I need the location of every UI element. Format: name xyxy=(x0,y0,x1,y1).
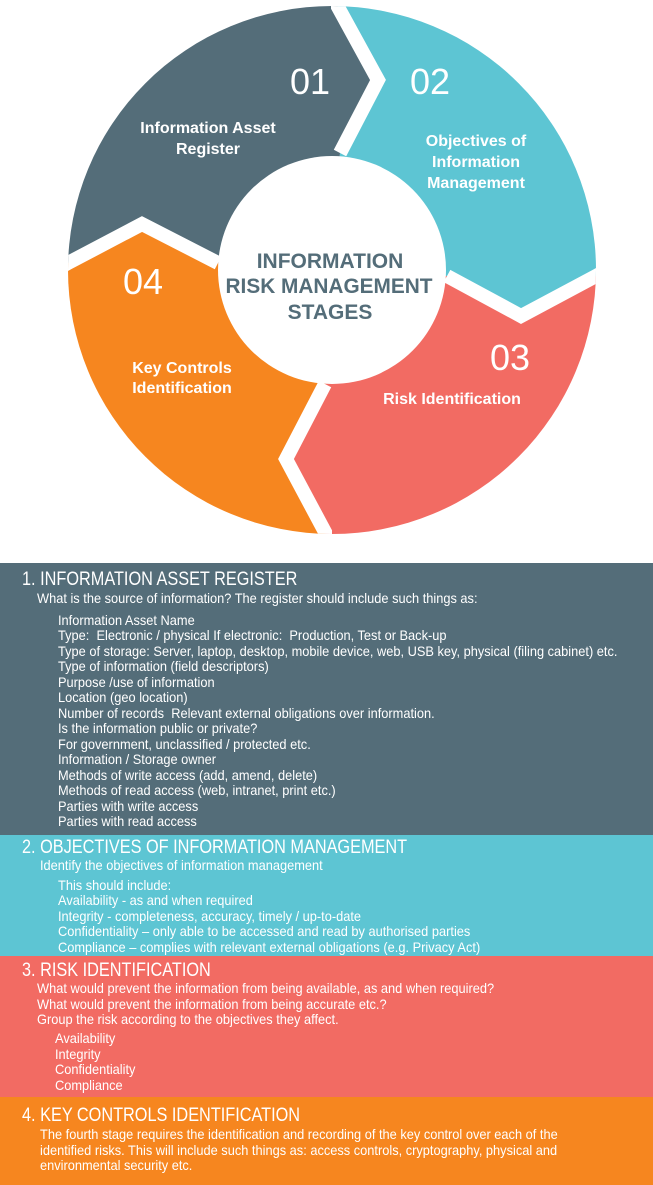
panel: risk identification: Availability xyxy=(55,1030,115,1046)
segment labels: Key Controls xyxy=(132,360,232,377)
panel: objectives: Compliance – complies with relevant external obligations (e.g. Privacy Act) xyxy=(58,939,480,955)
center title: INFORMATION xyxy=(257,250,403,273)
panel: information asset register: Type of information (field descriptors) xyxy=(58,658,269,674)
panel: information asset register: Is the information public or private? xyxy=(58,720,257,736)
panel: risk identification xyxy=(0,956,653,1097)
panel: information asset register: Information Asset Name xyxy=(58,612,195,628)
panel: key controls: environmental security etc. xyxy=(40,1157,192,1173)
panel: risk identification: Group the risk according to the objectives they affect. xyxy=(37,1011,339,1027)
segment labels: Objectives of xyxy=(426,133,527,150)
panel: information asset register: Purpose /use of information xyxy=(58,674,215,690)
segment labels: Risk Identification xyxy=(383,391,521,408)
segment 3 red xyxy=(294,276,596,534)
numbers: 01 xyxy=(290,61,330,102)
panel: information asset register: Type of storage: Server, laptop, desktop, mobile device, web, USB key, physical (filing cabinet) etc. xyxy=(58,643,617,659)
center title: STAGES xyxy=(288,301,372,324)
panel: information asset register: Number of records Relevant external obligations over information. xyxy=(58,705,435,721)
heading 3: 3. RISK IDENTIFICATION xyxy=(22,960,211,981)
numbers xyxy=(123,61,530,378)
segment labels: Register xyxy=(176,141,240,158)
panel: information asset register: Parties with write access xyxy=(58,798,198,814)
heading 2: 2. OBJECTIVES OF INFORMATION MANAGEMENT xyxy=(22,837,407,858)
center title xyxy=(226,250,433,324)
numbers: 02 xyxy=(410,61,450,102)
segment labels: Information Asset xyxy=(140,120,276,137)
center title: RISK MANAGEMENT xyxy=(226,275,433,298)
segment 1 dark xyxy=(68,6,370,263)
segment labels: Management xyxy=(427,175,526,192)
heading 1: 1. INFORMATION ASSET REGISTER xyxy=(22,569,297,590)
panel: objectives: Confidentiality – only able to be accessed and read by authorised parties xyxy=(58,923,470,939)
cycle diagram xyxy=(68,6,596,534)
panel: objectives: Integrity - completeness, accuracy, timely / up-to-date xyxy=(58,908,361,924)
heading 4: 4. KEY CONTROLS IDENTIFICATION xyxy=(22,1105,300,1126)
panel: information asset register: Parties with read access xyxy=(58,813,197,829)
panel: risk identification: What would prevent the information from being accurate etc.? xyxy=(37,996,387,1012)
panel: risk identification: Confidentiality xyxy=(55,1061,135,1077)
panel: information asset register: For government, unclassified / protected etc. xyxy=(58,736,311,752)
panel: information asset register: Type: Electronic / physical If electronic: Production, Test or Back-up xyxy=(58,627,447,643)
segment 4 orange xyxy=(68,232,325,534)
panel: objectives: Availability - as and when required xyxy=(58,892,253,908)
panel: information asset register xyxy=(0,563,653,835)
panel: objectives: Identify the objectives of information management xyxy=(40,857,323,873)
panel: information asset register: What is the source of information? The register should include such things as: xyxy=(37,590,478,606)
panel: information asset register: Location (geo location) xyxy=(58,689,188,705)
panel: objectives xyxy=(0,835,653,956)
panel: key controls: The fourth stage requires the identification and recording of the key control over each of the xyxy=(40,1126,558,1142)
segment labels xyxy=(132,120,527,408)
panel: information asset register: Methods of write access (add, amend, delete) xyxy=(58,767,317,783)
segment 2 cyan xyxy=(338,6,596,308)
segment labels: Identification xyxy=(132,380,232,397)
center circle xyxy=(218,156,446,384)
panel: objectives: This should include: xyxy=(58,877,171,893)
panel: information asset register: Methods of read access (web, intranet, print etc.) xyxy=(58,782,336,798)
numbers: 04 xyxy=(123,261,163,302)
panel: information asset register: Information / Storage owner xyxy=(58,751,216,767)
panel: risk identification: What would prevent the information from being available, as and when required? xyxy=(37,980,494,996)
numbers: 03 xyxy=(490,337,530,378)
panel: risk identification: Integrity xyxy=(55,1046,101,1062)
segment labels: Information xyxy=(432,154,520,171)
panel: risk identification: Compliance xyxy=(55,1077,123,1093)
panel: key controls xyxy=(0,1097,653,1185)
panel: key controls: identified risks. This will include such things as: access controls, cryptography, physical and xyxy=(40,1142,557,1158)
